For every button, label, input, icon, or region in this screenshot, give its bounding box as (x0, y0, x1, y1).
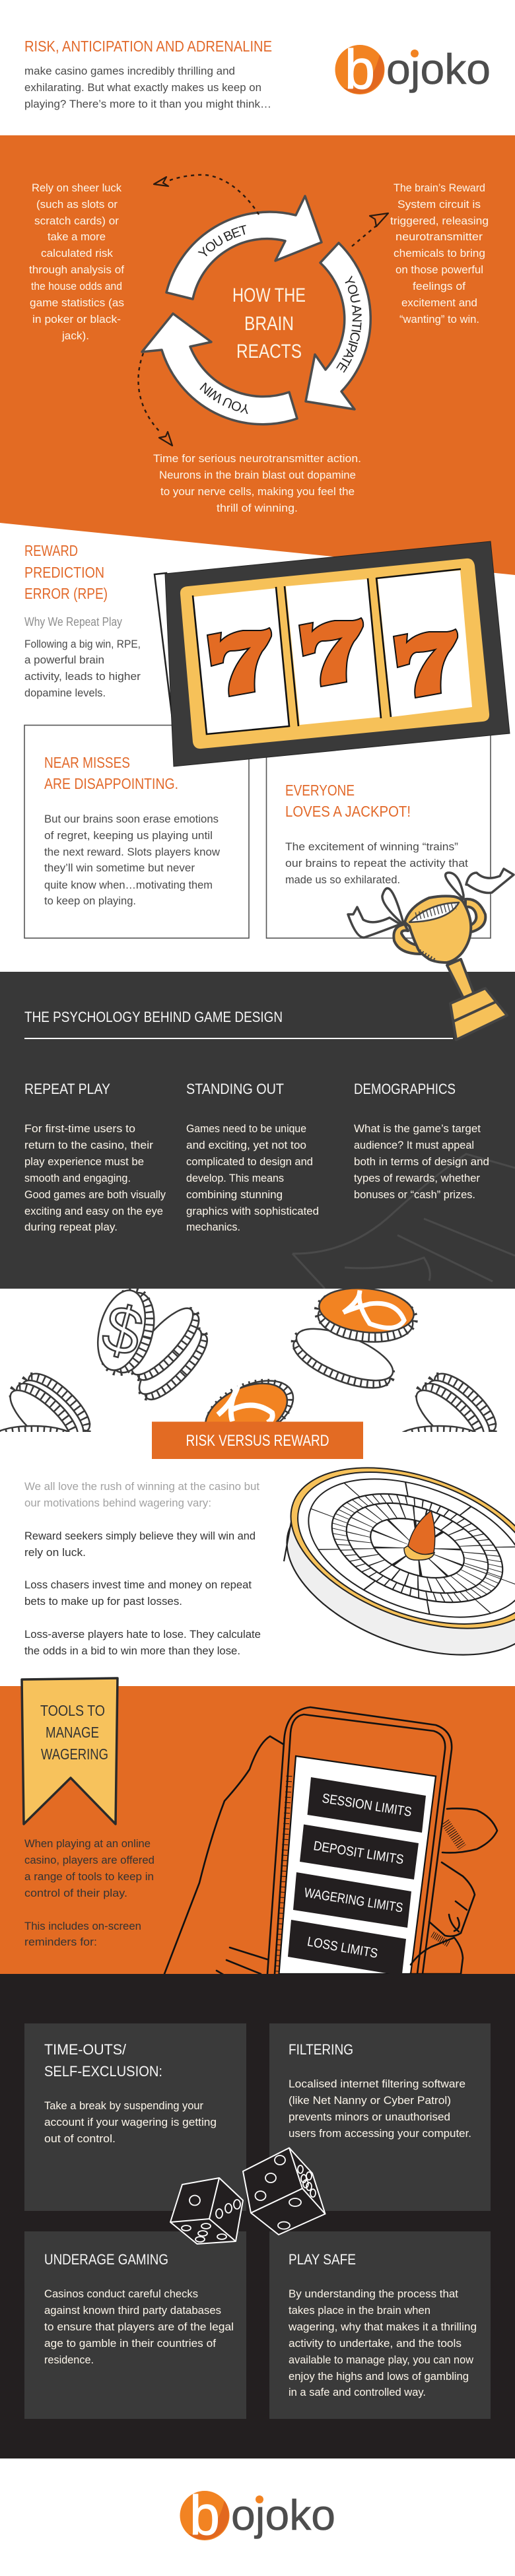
panel: underage gaming: age to gamble in their countries of (44, 2337, 216, 2350)
illustration: dollar coin stack: $ (95, 1290, 150, 1371)
intro text block (24, 65, 271, 110)
illustration: dollar coin stack (96, 1289, 209, 1401)
panel: underage gaming: Casinos conduct careful checks (44, 2288, 198, 2300)
arrow: you anticipate: YOU ANTICIPATE (336, 275, 362, 373)
logo: bojoko bottom: ojoko (231, 2491, 335, 2539)
ribbon: tools to manage wagering: WAGERING (41, 1746, 108, 1763)
panel: play safe: available to manage play, you can now (289, 2354, 474, 2366)
panel: near misses: of regret, keeping us playing until (44, 829, 213, 842)
panel: play safe: enjoy the highs and lows of gambling (289, 2370, 469, 2383)
panel: play safe (269, 2231, 491, 2419)
panel: underage gaming (24, 2231, 246, 2419)
panel: play safe: By understanding the process that (289, 2288, 458, 2300)
panel: filtering: Localised internet filtering software (289, 2078, 465, 2090)
text: you bet explanation: through analysis of (29, 263, 124, 276)
text: you anticipate explanation (390, 182, 489, 325)
illustration: left coin pile (0, 1372, 91, 1432)
panel: near misses: NEAR MISSES (44, 754, 130, 771)
panel: everyone loves a jackpot (267, 725, 491, 938)
illustration: orange bojoko coin stack (291, 1289, 418, 1389)
panel: time-outs and self-exclusion: account if your wagering is getting (44, 2116, 217, 2128)
panel: filtering: prevents minors or unauthorised (289, 2111, 450, 2123)
heading: how the brain reacts: HOW THE (232, 285, 306, 306)
illustration: right coin pile (401, 1372, 497, 1432)
logo: bojoko top: ojoko (386, 45, 491, 93)
column: standing out: develop. This means (186, 1172, 284, 1184)
arrow: you anticipate (304, 242, 372, 411)
illustration: hand holding phone (164, 1707, 497, 1975)
column: repeat play: For first-time users to (24, 1122, 135, 1135)
panel: everyone loves a jackpot: The excitement of winning “trains” (285, 840, 458, 853)
heading: how the brain reacts: BRAIN (244, 313, 294, 335)
column: demographics: both in terms of design and (354, 1155, 489, 1168)
panel: everyone loves a jackpot: made us so exhilarated. (285, 873, 400, 886)
text: loss-averse players: Loss-averse players hate to lose. They calculate (24, 1628, 261, 1641)
column: demographics (354, 1081, 489, 1201)
text: loss-averse players (24, 1628, 261, 1657)
panel: underage gaming: UNDERAGE GAMING (44, 2251, 168, 2268)
panel: filtering (269, 2023, 491, 2211)
text: you bet explanation: scratch cards) or (34, 215, 119, 227)
text: risk versus reward intro (24, 1480, 259, 1509)
column: standing out: STANDING OUT (186, 1081, 284, 1097)
panel: filtering: FILTERING (289, 2041, 353, 2058)
text: reward seekers: rely on luck. (24, 1546, 86, 1559)
ribbon: tools to manage wagering: TOOLS TO (40, 1702, 105, 1719)
heading: reward prediction error: ERROR (RPE) (24, 585, 108, 602)
text: tools description: a range of tools to keep in (24, 1870, 154, 1883)
intro text block: make casino games incredibly thrilling and (24, 65, 235, 77)
column: standing out (186, 1081, 319, 1233)
text: you anticipate explanation: The brain’s Reward (394, 182, 485, 194)
heading: reward prediction error: REWARD (24, 542, 78, 559)
column: repeat play: Good games are both visually (24, 1188, 166, 1201)
panel: everyone loves a jackpot: EVERYONE (285, 782, 355, 799)
text: you bet explanation: jack). (61, 329, 89, 342)
arrow: you win (141, 312, 298, 425)
logo: bojoko top (335, 38, 491, 100)
text: you anticipate explanation: on those powerful (395, 263, 483, 276)
text: you anticipate explanation: neurotransmitter (395, 230, 483, 243)
text: you bet explanation: in poker or black- (32, 313, 121, 325)
intro text block: playing? There’s more to it than you might think… (24, 98, 271, 110)
panel: time-outs and self-exclusion: SELF-EXCLUSION: (44, 2063, 162, 2080)
logo: bojoko bottom (180, 2484, 335, 2546)
panel: time-outs and self-exclusion (24, 2023, 246, 2211)
text: you anticipate explanation: “wanting” to win. (399, 313, 479, 325)
arrow: you bet: YOU BET (198, 224, 246, 256)
text: RPE description: dopamine levels. (24, 687, 106, 699)
text: you anticipate explanation: System circuit is (397, 198, 481, 211)
text: risk versus reward intro: our motivations behind wagering vary: (24, 1497, 211, 1509)
column: demographics: DEMOGRAPHICS (354, 1081, 456, 1097)
text: loss chasers (24, 1578, 252, 1608)
arrow: dashed pointer to left text (154, 175, 259, 215)
heading: reward prediction error (24, 542, 108, 602)
illustration: roulette wheel (283, 1467, 515, 1656)
text: you bet explanation: game statistics (as (30, 296, 124, 309)
panel: tools orange background (0, 1686, 515, 1974)
text: you anticipate explanation: excitement and (401, 296, 477, 309)
banner: risk versus reward (152, 1422, 363, 1459)
text: you bet explanation (29, 182, 124, 342)
icon: right die (243, 2148, 325, 2235)
text: tools description: reminders for: (24, 1936, 97, 1948)
column: demographics: bonuses or “cash” prizes. (354, 1188, 475, 1201)
panel: near misses: ARE DISAPPOINTING. (44, 775, 178, 792)
illustration: orange coin behind banner (196, 1369, 302, 1454)
arrow: you bet (165, 195, 323, 300)
column: standing out: mechanics. (186, 1221, 240, 1233)
column: repeat play: REPEAT PLAY (24, 1081, 110, 1097)
text: you win explanation: thrill of winning. (217, 502, 298, 514)
illustration: hand holding phone: WAGERING LIMITS (303, 1885, 404, 1916)
text: loss-averse players: the odds in a bid to win more than they lose. (24, 1644, 240, 1657)
panel: play safe: wagering, why that makes it a thrilling (288, 2321, 477, 2333)
panel: play safe: takes place in the brain when (289, 2304, 430, 2317)
panel: near misses: the next reward. Slots players know (44, 846, 221, 858)
illustration: hand holding phone: SESSION LIMITS (321, 1791, 413, 1819)
text: RPE description (24, 638, 141, 699)
ribbon: tools to manage wagering: MANAGE (46, 1724, 99, 1741)
heading: how the brain reacts: REACTS (236, 341, 302, 362)
panel: play safe: activity to undertake, and the tools (289, 2337, 462, 2350)
icon: left die (170, 2178, 243, 2244)
panel: how the brain reacts orange background (0, 135, 515, 575)
text: loss chasers: Loss chasers invest time and money on repeat (24, 1578, 252, 1591)
panel: filtering: (like Net Nanny or Cyber Patrol) (289, 2094, 451, 2107)
text: RPE description: Following a big win, RPE, (24, 638, 141, 650)
text: you win explanation: to your nerve cells, making you feel the (160, 485, 355, 498)
panel: near misses: But our brains soon erase emotions (44, 813, 219, 825)
panel: near misses: quite know when…motivating them (44, 879, 213, 891)
column: standing out: and exciting, yet not too (186, 1139, 306, 1151)
arrow: dashed pointer to right text (352, 213, 388, 246)
text: loss chasers: bets to make up for past losses. (24, 1595, 182, 1608)
column: demographics: What is the game’s target (354, 1122, 481, 1135)
column: demographics: types of rewards, whether (354, 1172, 480, 1184)
watermark: faint roulette outline (292, 1154, 515, 1289)
panel: everyone loves a jackpot: LOVES A JACKPOT! (285, 803, 411, 820)
text: tools description: control of their play. (24, 1887, 127, 1899)
text: you win explanation: Neurons in the brain blast out dopamine (159, 469, 356, 481)
panel: underage gaming: against known third party databases (44, 2304, 221, 2317)
panel: near misses: they’ll win sometime but never (44, 862, 195, 874)
panel: tools detail dark background (0, 1974, 515, 2458)
panel: underage gaming: residence. (44, 2354, 94, 2366)
panel: play safe: in a safe and controlled way. (289, 2386, 426, 2398)
heading: the psychology behind game design: THE PSYCHOLOGY BEHIND GAME DESIGN (24, 1009, 283, 1025)
text: you anticipate explanation: feelings of (413, 280, 465, 292)
text: RPE description: a powerful brain (24, 654, 104, 666)
column: standing out: Games need to be unique (186, 1122, 306, 1135)
panel: time-outs and self-exclusion: out of control. (44, 2132, 116, 2145)
text: you anticipate explanation: chemicals to bring (394, 247, 485, 259)
illustration: hand holding phone: DEPOSIT LIMITS (312, 1839, 405, 1868)
heading: reward prediction error: PREDICTION (24, 564, 104, 581)
illustration: trophy (348, 869, 514, 1040)
column: repeat play: during repeat play. (24, 1221, 118, 1233)
logo: bojoko top: b (345, 38, 375, 100)
text: you bet explanation: the house odds and (31, 280, 122, 292)
text: tools description: When playing at an online (24, 1837, 151, 1850)
text: tools description: This includes on-screen (24, 1920, 141, 1932)
panel: time-outs and self-exclusion: TIME-OUTS/ (44, 2041, 127, 2058)
panel: everyone loves a jackpot: our brains to repeat the activity that (285, 857, 468, 869)
column: repeat play: return to the casino, their (24, 1139, 153, 1151)
text: you win explanation (153, 452, 361, 514)
ribbon: tools to manage wagering (22, 1678, 118, 1824)
text: you bet explanation: (such as slots or (36, 198, 118, 211)
text: you bet explanation: calculated risk (41, 247, 113, 259)
text: reward seekers (24, 1530, 256, 1559)
text: risk versus reward intro: We all love the rush of winning at the casino but (24, 1480, 259, 1493)
banner: risk versus reward: RISK VERSUS REWARD (186, 1432, 329, 1450)
text: reward seekers: Reward seekers simply believe they will win and (24, 1530, 256, 1542)
column: standing out: combining stunning (186, 1188, 283, 1201)
logo: bojoko bottom: b (189, 2484, 220, 2546)
panel: near misses: to keep on playing. (44, 895, 136, 907)
intro text block: exhilarating. But what exactly makes us keep on (24, 81, 261, 94)
column: standing out: graphics with sophisticated (186, 1205, 319, 1217)
column: repeat play: smooth and engaging. (24, 1172, 131, 1184)
text: you bet explanation: Rely on sheer luck (32, 182, 121, 194)
intro heading: RISK, ANTICIPATION AND ADRENALINE (24, 38, 272, 55)
panel: time-outs and self-exclusion: Take a break by suspending your (44, 2099, 203, 2112)
column: standing out: complicated to design and (186, 1155, 313, 1168)
panel: filtering: users from accessing your computer. (289, 2127, 471, 2140)
text: you bet explanation: take a more (48, 230, 106, 243)
panel: psychology behind game design dark background (0, 972, 515, 1289)
column: repeat play: play experience must be (24, 1155, 144, 1168)
arrow: dashed pointer to bottom text (138, 353, 172, 446)
arrow: you win: YOU WIN (199, 382, 248, 415)
text: tools description (24, 1837, 154, 1948)
panel: near misses (24, 725, 249, 938)
illustration: hand holding phone: LOSS LIMITS (306, 1934, 379, 1961)
text: you anticipate explanation: triggered, releasing (390, 215, 489, 227)
illustration: slot machine 777 (154, 541, 510, 766)
text: RPE description: activity, leads to higher (24, 670, 141, 683)
column: demographics: audience? It must appeal (354, 1139, 474, 1151)
panel: underage gaming: to ensure that players are of the legal (44, 2321, 234, 2333)
text: you win explanation: Time for serious neurotransmitter action. (153, 452, 361, 465)
column: repeat play (24, 1081, 166, 1233)
column: repeat play: exciting and easy on the eye (24, 1205, 163, 1217)
text: tools description: casino, players are offered (24, 1854, 154, 1866)
subheading: why we repeat play: Why We Repeat Play (24, 615, 122, 628)
heading: how the brain reacts (232, 285, 306, 362)
panel: play safe: PLAY SAFE (289, 2251, 356, 2268)
